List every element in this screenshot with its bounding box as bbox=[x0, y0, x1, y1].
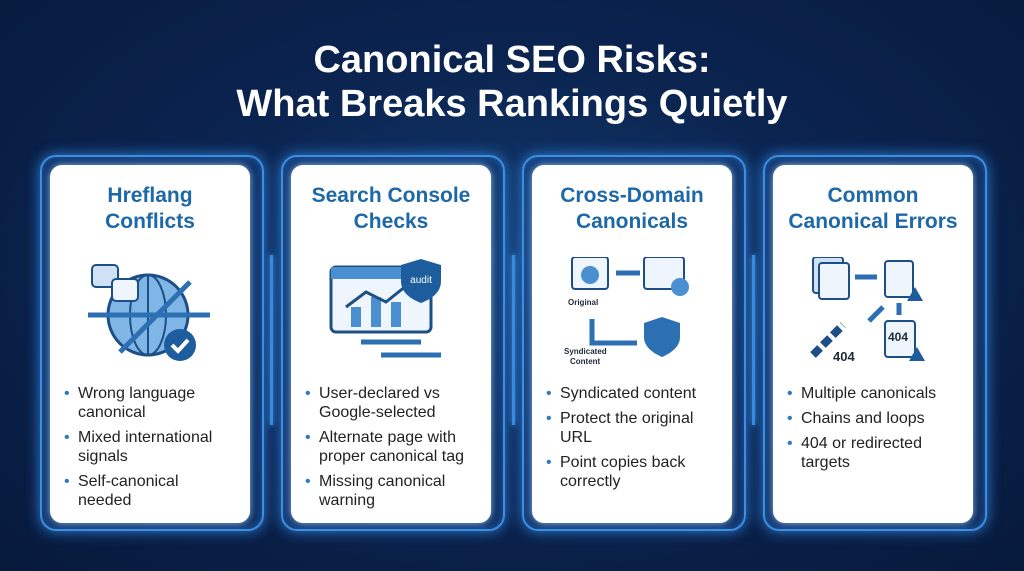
bullets: User-declared vs Google-selected bbox=[319, 385, 440, 421]
heading: Checks bbox=[354, 210, 428, 233]
panel frame 2 bbox=[281, 155, 505, 531]
connector: 3 to 4 bbox=[752, 255, 755, 425]
bullets: Chains and loops bbox=[801, 410, 925, 427]
bullets: 404 or redirected targets bbox=[801, 435, 922, 471]
heading: Common bbox=[828, 184, 918, 207]
panel frame 4 bbox=[763, 155, 987, 531]
panel: hreflang conflicts bbox=[50, 165, 250, 523]
icon: documents chain 404: 404 bbox=[888, 330, 908, 344]
heading bbox=[788, 184, 958, 233]
bullets: Multiple canonicals bbox=[801, 385, 936, 402]
heading: Canonical Errors bbox=[788, 210, 958, 233]
icon: original and syndicated pages: Syndicated bbox=[564, 347, 607, 356]
bullets: Alternate page with proper canonical tag bbox=[319, 429, 464, 465]
icon: documents chain 404 bbox=[810, 257, 925, 364]
heading bbox=[560, 184, 704, 233]
bullets: Point copies back correctly bbox=[560, 454, 685, 490]
heading: Canonicals bbox=[576, 210, 688, 233]
bullets bbox=[546, 385, 696, 490]
bullets bbox=[306, 385, 464, 509]
bullets: Protect the original URL bbox=[560, 410, 693, 446]
bullets: Wrong language canonical bbox=[78, 385, 195, 421]
heading bbox=[312, 184, 470, 233]
icon: browser chart with audit shield: audit bbox=[410, 275, 432, 286]
bullets bbox=[64, 385, 212, 509]
panel: cross-domain canonicals bbox=[532, 165, 732, 523]
heading: Cross-Domain bbox=[560, 184, 704, 207]
title: Canonical SEO Risks: bbox=[313, 39, 710, 81]
connector: 2 to 3 bbox=[512, 255, 515, 425]
bullets: Missing canonical warning bbox=[319, 473, 445, 509]
title bbox=[236, 39, 788, 125]
icon: original and syndicated pages: Original bbox=[568, 298, 598, 307]
icon: original and syndicated pages: Content bbox=[570, 357, 601, 366]
panel frame 1 bbox=[40, 155, 264, 531]
bullets: Syndicated content bbox=[560, 385, 696, 402]
heading bbox=[105, 184, 195, 233]
bullets: Mixed international signals bbox=[78, 429, 212, 465]
icon: globe with arrows bbox=[88, 264, 210, 361]
panel: search console checks bbox=[291, 165, 491, 523]
icon: browser chart with audit shield bbox=[330, 259, 441, 358]
bullets bbox=[788, 385, 936, 471]
heading: Conflicts bbox=[105, 210, 195, 233]
heading: Search Console bbox=[312, 184, 470, 207]
panel: common canonical errors bbox=[773, 165, 973, 523]
icon: original and syndicated pages bbox=[564, 257, 689, 366]
heading: Hreflang bbox=[107, 184, 193, 207]
title: What Breaks Rankings Quietly bbox=[236, 83, 788, 125]
icon: documents chain 404: 404 bbox=[833, 349, 855, 364]
panel frame 3 bbox=[522, 155, 746, 531]
bullets: Self-canonical needed bbox=[78, 473, 178, 509]
connector: 1 to 2 bbox=[270, 255, 273, 425]
